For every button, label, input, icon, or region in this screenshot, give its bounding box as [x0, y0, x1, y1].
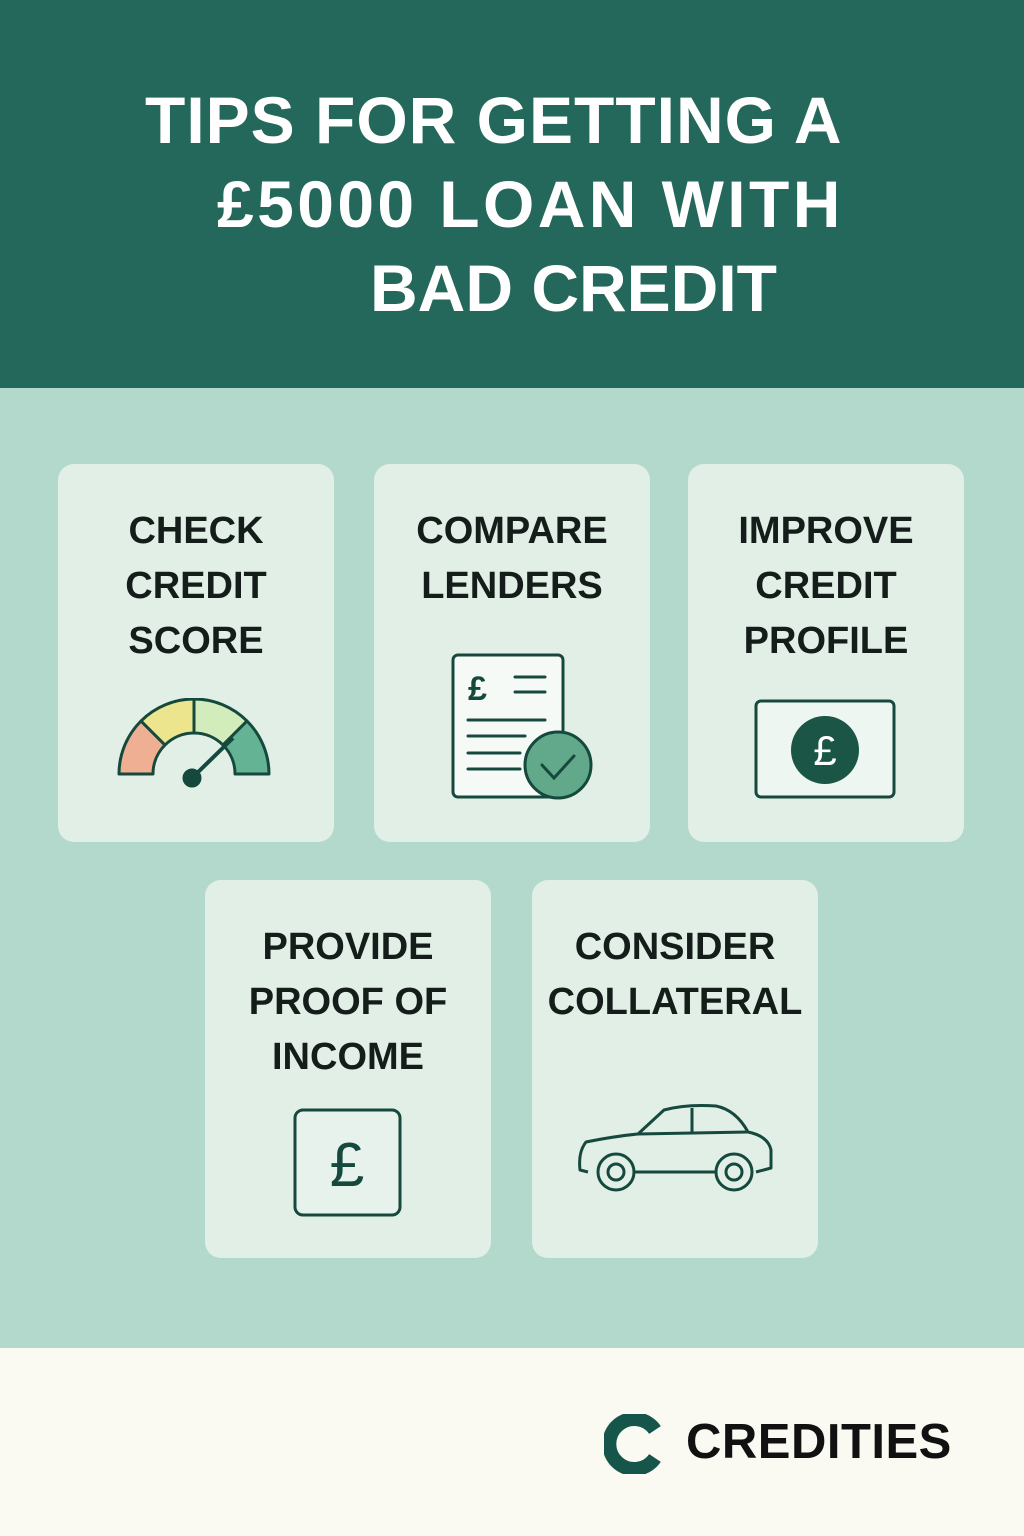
icon: car — [578, 1104, 772, 1192]
footer — [0, 1348, 1024, 1536]
header band — [0, 0, 1024, 388]
card: compare lenders — [374, 464, 650, 842]
title — [145, 83, 844, 325]
card: consider collateral: CONSIDER — [575, 926, 775, 968]
card: compare lenders: LENDERS — [421, 565, 603, 607]
title: BAD CREDIT — [370, 251, 777, 325]
card: improve credit profile: PROFILE — [744, 620, 908, 662]
card: provide proof of income: INCOME — [272, 1036, 424, 1078]
logo: CREDITIES — [686, 1415, 952, 1469]
icon: banknote: £ — [813, 727, 837, 774]
card: check credit score: CREDIT — [125, 565, 267, 607]
card: check credit score — [58, 464, 334, 842]
icon: banknote — [754, 700, 896, 798]
icon: pound box: £ — [330, 1131, 364, 1200]
card: provide proof of income: PROVIDE — [262, 926, 434, 968]
card: improve credit profile — [688, 464, 964, 842]
icon: pound box — [294, 1108, 402, 1216]
icon: document with check — [452, 654, 592, 800]
card: improve credit profile: IMPROVE — [738, 510, 914, 552]
title: £5000 LOAN WITH — [217, 167, 844, 241]
card: consider collateral — [532, 880, 818, 1258]
icon: document with check: £ — [468, 670, 487, 708]
icon: logo C — [604, 1414, 661, 1474]
card: check credit score: SCORE — [128, 620, 264, 662]
card: consider collateral: COLLATERAL — [548, 981, 802, 1023]
card: compare lenders: COMPARE — [416, 510, 608, 552]
title: TIPS FOR GETTING A — [145, 83, 843, 157]
card: check credit score: CHECK — [128, 510, 264, 552]
logo — [604, 1414, 952, 1474]
icon: gauge — [118, 698, 270, 788]
card: provide proof of income — [205, 880, 491, 1258]
card: improve credit profile: CREDIT — [755, 565, 897, 607]
card: provide proof of income: PROOF OF — [249, 981, 447, 1023]
